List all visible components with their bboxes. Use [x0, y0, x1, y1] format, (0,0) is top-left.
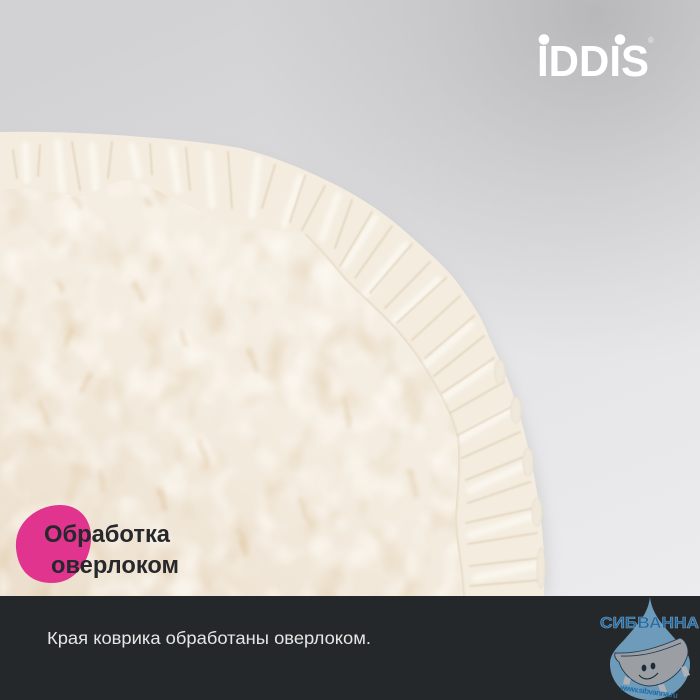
pile crevices: [40, 197, 418, 555]
pile shading noise: [0, 189, 456, 596]
overlocked edge band: [0, 120, 560, 600]
pile highlight noise: [0, 170, 480, 600]
water drop: [610, 597, 690, 700]
watermark logo: Сибванна: [600, 597, 699, 700]
footer band: [0, 596, 700, 700]
tub feet: [623, 666, 690, 694]
feature heading: оверлоком: [51, 552, 179, 579]
mat shadow: [0, 136, 548, 596]
overlock stitches: [13, 142, 541, 586]
face: [642, 665, 646, 671]
brand logo: iDDiS: IDDIS: [537, 37, 649, 86]
footer description: Края коврика обработаны оверлоком.: [47, 628, 371, 648]
logo letter dots: [539, 34, 625, 45]
bath mat photo: [0, 120, 560, 600]
registered mark: ®: [648, 36, 654, 45]
feature heading: [44, 521, 179, 579]
fluffy pile: [0, 170, 480, 600]
outer binding loops: [495, 360, 545, 588]
pink accent blob: [16, 505, 91, 583]
website: www.sibvanna.ru: [619, 683, 679, 700]
feature heading: Обработка: [44, 521, 171, 548]
rope highlights: [25, 142, 538, 578]
bathtub: [615, 638, 690, 694]
shadow under fluffy pile: [305, 235, 463, 596]
brand name: СИБВАННА: [600, 615, 699, 632]
